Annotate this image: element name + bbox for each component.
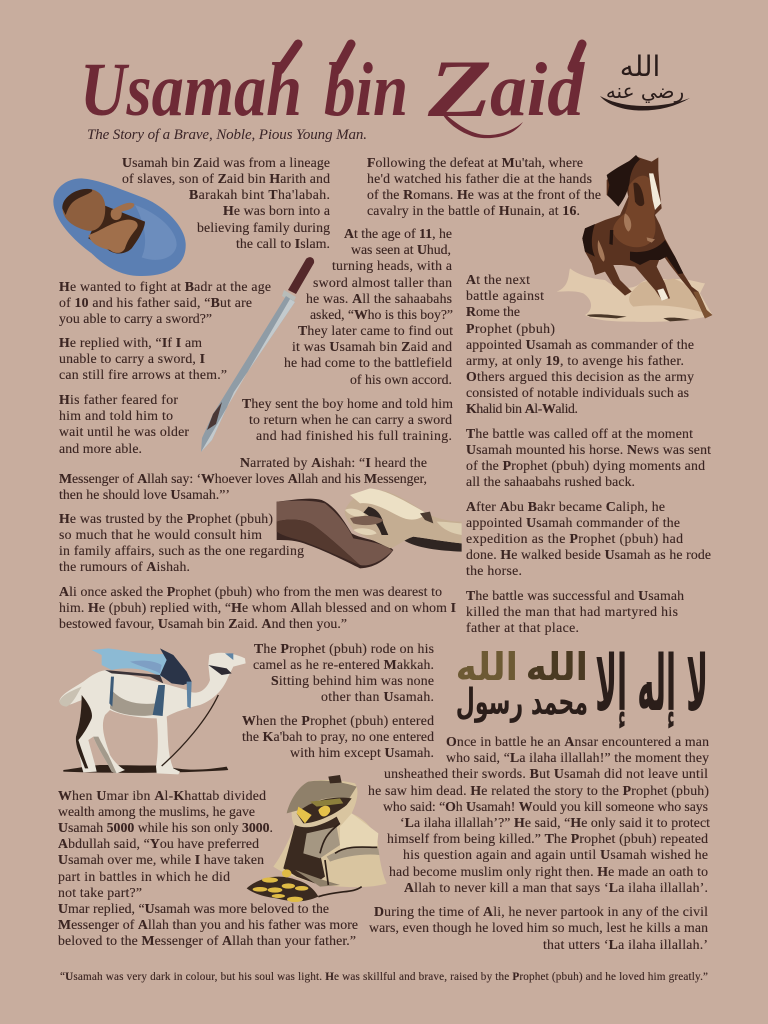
text block: next battle against Rome: Khalid bin Al-Walid. [466, 401, 578, 416]
text block: age of 11 at Uhud: he had come to the battlefield [284, 355, 452, 370]
text block: father feared [59, 392, 189, 456]
text block: sent home: They sent the boy home and told him [242, 396, 453, 411]
text block: the Ka'bah: the Ka'bah to pray, no one entered [242, 729, 434, 744]
text block: lineage: Barakah bint Tha'labah. [189, 187, 330, 202]
text block: age of 11 at Uhud [284, 226, 453, 387]
text block: battle called off: all the sahaabahs rushed back. [466, 474, 635, 489]
text block: trusted by the Prophet: the rumours of Aishah. [59, 559, 190, 574]
text block: sent home: to return when he can carry a sword [249, 412, 452, 427]
text block: sent home: and had finished his full training. [256, 428, 452, 443]
text block: La ilaha illallah story: his question again and again until Usamah wished he [403, 847, 708, 862]
text block: age of 11 at Uhud: They later came to find out [298, 323, 453, 338]
text block: Ali asked: bestowed favour, Usamah bin Zaid. And then you.” [59, 616, 347, 631]
text block: narrated by Aishah [59, 455, 427, 502]
text block: La ilaha illallah story: had become muslim only right then. He made an oath to [389, 864, 708, 879]
text block: time of Ali [369, 904, 708, 952]
text block: Umar divides wealth: part in battles in which he did [58, 869, 230, 884]
illustration: money sack with gold coins [247, 775, 387, 902]
title: Usamah [80, 48, 302, 132]
text block: trusted by the Prophet: He was trusted by the Prophet (pbuh) [59, 511, 273, 527]
text block: trusted by the Prophet [59, 511, 304, 574]
text block: battle successful: father at that place. [466, 620, 579, 635]
text block: father feared: and more able. [59, 441, 142, 456]
illustration: sword [201, 257, 314, 452]
text block: Abu Bakr: the horse. [466, 563, 522, 578]
text block: Umar divides wealth: When Umar ibn Al-Khattab divided [58, 788, 266, 803]
text block: lineage: believing family during [197, 220, 330, 235]
text block: La ilaha illallah story: who said: “Oh Usamah! Would you kill someone who says [383, 799, 708, 814]
text block: defeat at Mu'tah: of the Romans. He was at the front of the [367, 187, 601, 202]
text block: La ilaha illallah story: unsheathed their swords. But Usamah did not leave until [384, 766, 708, 781]
text block: next battle against Rome: Prophet (pbuh) [466, 321, 555, 337]
closing quote: “Usamah was very dark in colour, but his soul was light. He was skillful and brave, raised by the Prophet (pbuh) and he loved him greatly.” [60, 971, 708, 983]
text block: narrated by Aishah: then he should love Usamah.”’ [59, 487, 230, 502]
text block: lineage: He was born into a [223, 203, 330, 218]
text block: Umar divides wealth: wealth among the muslims, he gave [58, 804, 255, 819]
calligraphy: radiyallahu anhu: الله [620, 50, 660, 83]
text block: Abu Bakr: appointed Usamah commander of the [466, 515, 680, 530]
text block: fight at Badr: of 10 and his father said, “But are [59, 295, 252, 310]
text block: father feared: His father feared for [59, 392, 178, 407]
illustration: camel with blue saddle blanket [59, 648, 246, 774]
subtitle: The Story of a Brave, Noble, Pious Young Man. [87, 127, 367, 143]
text block: battle successful: killed the man that had martyred his [466, 604, 678, 619]
text block: age of 11 at Uhud: At the age of 11, he [344, 226, 452, 241]
text block: next battle against Rome: consisted of notable individuals such as [466, 385, 689, 400]
text block: next battle against Rome: Rome the [466, 304, 520, 319]
text block: lineage: Usamah bin Zaid was from a lineage [122, 155, 330, 170]
text block: Ali asked [59, 584, 456, 631]
calligraphy: shahada: محمد رسول [456, 681, 588, 724]
text block: father feared: him and told him to [59, 408, 173, 423]
text block: time of Ali: During the time of Ali, he never partook in any of the civil [374, 904, 708, 919]
text block: La ilaha illallah story: he saw him dead. He related the story to the Prophet (pbuh) [368, 783, 709, 799]
title: Z [427, 43, 492, 134]
text block: age of 11 at Uhud: he was. All the sahaabahs [306, 291, 452, 306]
calligraphy: shahada: الله [456, 644, 518, 689]
text block: battle successful [466, 588, 684, 635]
text block: fire arrows: He replied with, “If I am [59, 335, 202, 350]
title: bin [324, 48, 408, 132]
calligraphy: radiyallahu anhu [600, 50, 690, 111]
illustration: baby in blue blanket [53, 178, 186, 276]
text block: lineage [122, 155, 330, 251]
illustration: clasped hands [277, 488, 462, 568]
calligraphy: shahada: لا إله إلا [595, 639, 708, 730]
text block: Umar divides wealth: Messenger of Allah than you and his father was more [58, 917, 358, 932]
text block: Umar divides wealth: Umar replied, “Usamah was more beloved to the [58, 901, 329, 916]
calligraphy: shahada [456, 639, 708, 730]
text block: Ali asked: him. He (pbuh) replied with, “He whom Allah blessed and on whom I [59, 600, 456, 616]
text block: time of Ali: that utters ‘La ilaha illallah.’ [543, 937, 708, 952]
text block: next battle against Rome: At the next [466, 272, 530, 287]
text block: Abu Bakr: done. He walked beside Usamah as he rode [466, 547, 711, 562]
text block: narrated by Aishah: Messenger of Allah say: ‘Whoever loves Allah and his Messenger, [59, 471, 427, 486]
text block: camel into Makkah [253, 641, 434, 704]
text block: camel into Makkah: The Prophet (pbuh) rode on his [254, 641, 434, 657]
text block: fire arrows [59, 335, 227, 382]
text block: defeat at Mu'tah [367, 155, 601, 218]
text block: fire arrows: unable to carry a sword, I [59, 351, 205, 366]
text block: Umar divides wealth: Usamah over me, while I have taken [58, 852, 264, 867]
text block: battle called off [466, 426, 711, 489]
text block: age of 11 at Uhud: turning heads, with a [332, 258, 452, 273]
text block: next battle against Rome [466, 272, 694, 416]
text block: the Ka'bah: with him except Usamah. [290, 745, 434, 760]
text block: next battle against Rome: army, at only 19, to avenge his father. [466, 353, 684, 368]
text block: camel into Makkah: other than Usamah. [321, 689, 434, 704]
text block: Umar divides wealth: not take part?” [58, 885, 142, 900]
text block: Umar divides wealth: beloved to the Messenger of Allah than your father.” [58, 933, 356, 948]
text block: fight at Badr: you able to carry a sword?” [59, 311, 212, 326]
text block: narrated by Aishah: Narrated by Aishah: “I heard the [240, 455, 427, 470]
text block: Abu Bakr: After Abu Bakr became Caliph, he [466, 499, 665, 514]
text block: defeat at Mu'tah: cavalry in the battle of Hunain, at 16. [367, 203, 580, 218]
text block: age of 11 at Uhud: of his own accord. [350, 372, 452, 387]
text block: sent home [242, 396, 453, 443]
text block: father feared: wait until he was older [59, 424, 189, 439]
text block: the Ka'bah [242, 713, 434, 760]
text block: La ilaha illallah story: who said, “La ilaha illallah!” the moment they [446, 750, 709, 765]
text block: Ali asked: Ali once asked the Prophet (pbuh) who from the men was dearest to [59, 584, 442, 600]
title: aid [490, 48, 585, 132]
text block: La ilaha illallah story: Once in battle he an Ansar encountered a man [446, 734, 709, 749]
text block: next battle against Rome: Others argued this decision as the army [466, 369, 694, 384]
text block: trusted by the Prophet: so much that he would consult him [59, 527, 262, 542]
text block: lineage: the call to Islam. [236, 236, 330, 251]
text block: battle successful: The battle was successful and Usamah [466, 588, 684, 603]
text block: fight at Badr [59, 279, 271, 326]
text block: age of 11 at Uhud: it was Usamah bin Zaid and [292, 339, 452, 354]
text block: the Ka'bah: When the Prophet (pbuh) entered [242, 713, 434, 729]
text block: camel into Makkah: Sitting behind him was none [271, 673, 434, 688]
text block: trusted by the Prophet: in family affairs, such as the one regarding [59, 543, 304, 558]
text block: Abu Bakr: expedition as the Prophet (pbuh) had [466, 531, 683, 547]
text block: La ilaha illallah story: ‘La ilaha illallah’?” He said, “He only said it to protect [400, 815, 710, 830]
text block: Umar divides wealth: Usamah 5000 while his son only 3000. [58, 820, 273, 835]
calligraphy: radiyallahu anhu: رضي عنه [606, 79, 684, 104]
text block: age of 11 at Uhud: sword almost taller than [313, 275, 452, 290]
text block: La ilaha illallah story: himself from being killed.” The Prophet (pbuh) repeated [387, 831, 708, 847]
text block: next battle against Rome: appointed Usamah as commander of the [466, 337, 694, 352]
text block: defeat at Mu'tah: Following the defeat at Mu'tah, where [367, 155, 583, 170]
text block: next battle against Rome: battle against [466, 288, 544, 303]
text block: defeat at Mu'tah: he'd watched his father die at the hands [367, 171, 592, 186]
text block: camel into Makkah: camel as he re-entered Makkah. [253, 657, 434, 672]
text block: Umar divides wealth [58, 788, 358, 948]
text block: age of 11 at Uhud: was seen at Uhud, [351, 242, 451, 257]
text block: La ilaha illallah story [368, 734, 710, 895]
text block: fire arrows: can still fire arrows at them.” [59, 367, 227, 382]
text block: battle called off: The battle was called off at the moment [466, 426, 693, 441]
illustration: galloping horse [557, 155, 712, 322]
text block: battle called off: of the Prophet (pbuh) dying moments and [466, 458, 705, 474]
text block: Umar divides wealth: Abdullah said, “You have preferred [58, 836, 259, 851]
text block: fight at Badr: He wanted to fight at Badr at the age [59, 279, 271, 294]
text block: age of 11 at Uhud: asked, “Who is this boy?” [310, 307, 453, 322]
text block: Abu Bakr [466, 499, 711, 578]
text block: battle called off: Usamah mounted his horse. News was sent [466, 442, 711, 457]
calligraphy: shahada: الله [526, 644, 588, 689]
text block: La ilaha illallah story: Allah to never kill a man that says ‘La ilaha illallah’. [404, 880, 708, 895]
text block: time of Ali: wars, even though he loved him so much, lest he kills a man [369, 920, 708, 935]
title [80, 43, 585, 138]
text block: lineage: of slaves, son of Zaid bin Harith and [122, 171, 330, 186]
